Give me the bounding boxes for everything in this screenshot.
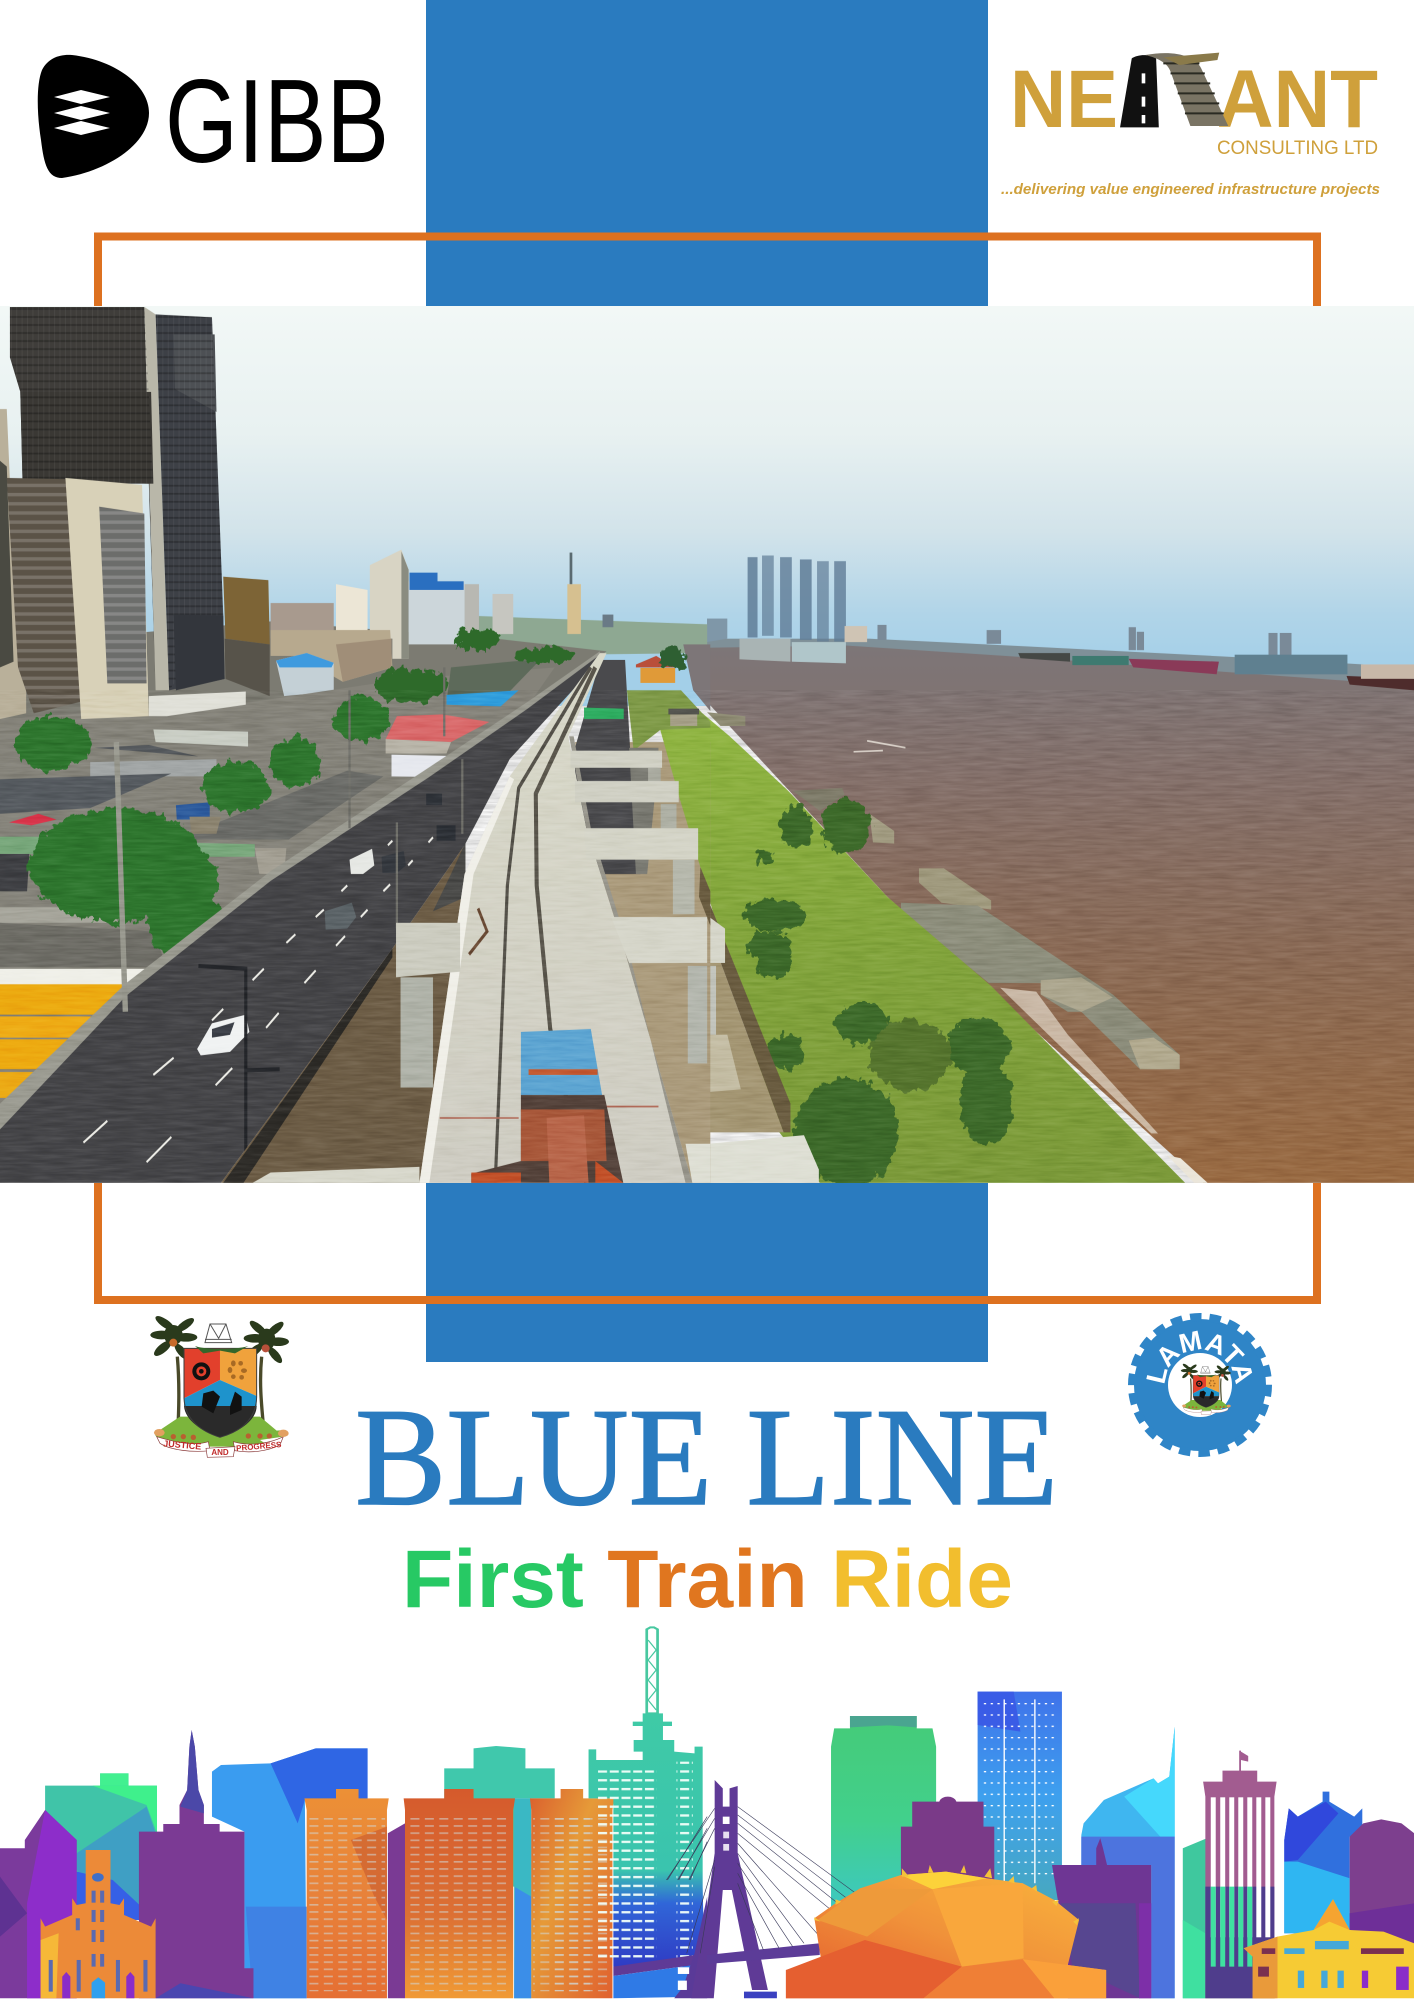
- logo: Nexant Consulting: ...delivering value engineered infrastructure projects: [1001, 181, 1380, 198]
- tower 3: [530, 1789, 614, 1998]
- green tower: [831, 1716, 936, 1907]
- purple block: [901, 1797, 994, 1880]
- tower 2: [404, 1789, 515, 1998]
- west side: city, road, guideway: [0, 307, 710, 1183]
- big blue building: [212, 1748, 368, 1998]
- guideway pier: [710, 918, 726, 963]
- maintenance vehicle: [471, 1029, 623, 1183]
- tracks: [495, 667, 591, 1183]
- state coat of arms: [150, 1314, 289, 1457]
- water: [702, 646, 1414, 1183]
- foam: [1000, 988, 1158, 1133]
- purple west building: [0, 1810, 77, 1998]
- skyline: east half: [666, 1692, 1414, 1998]
- teal building: [45, 1773, 157, 1920]
- centre teal building: [444, 1746, 555, 1998]
- blue tower: [978, 1692, 1062, 1900]
- fence, dirt, slab: [710, 962, 784, 1132]
- lagoon and east shore: [702, 555, 1414, 1187]
- lagoon edge: [683, 644, 710, 711]
- logo: GIBB: [38, 55, 389, 188]
- green trees far: [373, 628, 577, 703]
- grass bank: [702, 713, 1185, 1183]
- guideway deck: [419, 653, 692, 1183]
- bushes: [743, 798, 1014, 1187]
- blue panel: bottom: [426, 1183, 988, 1362]
- roofs and signs: [386, 714, 489, 742]
- piers: [707, 712, 745, 726]
- tower 1: [304, 1789, 389, 1998]
- spire building: [139, 1730, 253, 1998]
- green sign: [584, 708, 624, 719]
- logo: Nexant Consulting: NE: [1010, 54, 1118, 145]
- logo: Nexant Consulting: CONSULTING LTD: [1217, 138, 1378, 159]
- lamp posts: [116, 742, 125, 1012]
- ships: [1018, 653, 1070, 662]
- yellow stacks: [0, 968, 145, 984]
- logo: Nexant Consulting: [1001, 53, 1380, 198]
- purple behind towers: [388, 1823, 405, 1998]
- parking: [0, 774, 171, 814]
- blue gabled building: [1284, 1792, 1362, 1933]
- state coat of arms: JUSTICE: [163, 1438, 202, 1452]
- oil rigs: [748, 555, 846, 642]
- ground buildings: [149, 691, 246, 716]
- bridge cables west: [667, 1817, 707, 1880]
- crossheads and columns: [396, 751, 707, 1088]
- purple block right: [1052, 1838, 1151, 1998]
- haze strip: [469, 616, 707, 656]
- carriageway: [575, 660, 640, 874]
- distant skyline: [271, 550, 613, 659]
- state coat of arms: PROGRESS: [236, 1440, 282, 1453]
- lane markings: [83, 837, 433, 1162]
- ground beneath: [221, 845, 465, 1183]
- far shore: [707, 638, 1414, 681]
- bridge deck west: [613, 1953, 707, 1976]
- bridge pylon: [666, 1780, 856, 1998]
- subtitle: First Train Ride: First Train Ride: [402, 1534, 1013, 1625]
- orange frame: bottom: [98, 1183, 1317, 1300]
- column tower: [1203, 1751, 1277, 1998]
- green building behind columns: [1183, 1833, 1257, 1998]
- green trees near: [15, 697, 389, 960]
- east of guideway: bank and carriageway: [575, 644, 710, 1183]
- state coat of arms: AND: [211, 1448, 229, 1457]
- teal tower with mast: [589, 1627, 704, 1967]
- purple domed building: [1350, 1819, 1414, 1945]
- ground: [0, 667, 555, 1115]
- road: [0, 653, 607, 1183]
- orange frame: top: [98, 236, 1317, 306]
- yellow colonial building: [1244, 1899, 1414, 1998]
- church: [41, 1850, 156, 1998]
- distant buildings: [877, 625, 1291, 656]
- icon: road and rail arch: [1120, 53, 1228, 127]
- orange building and trees: [640, 668, 675, 683]
- photo grain: [0, 690, 1414, 1183]
- bridge cables east: [666, 1807, 856, 1953]
- stadium dome: [786, 1865, 1106, 1998]
- blue panel: top: [426, 0, 988, 306]
- city base: [0, 616, 707, 720]
- title: BLUE LINE: BLUE LINE: [355, 1380, 1058, 1535]
- skyline illustration: [0, 1627, 1414, 1998]
- cars: [197, 1015, 249, 1055]
- bridge leg: [674, 1897, 707, 1998]
- towers: [10, 307, 156, 690]
- photo: Blue Line guideway along Lagos lagoon: [0, 306, 1414, 1187]
- logo: LAMATA gear: [1128, 1313, 1272, 1457]
- plot behind: [627, 690, 710, 751]
- logo: LAMATA gear: LAMATA: [1146, 1330, 1252, 1384]
- cyan curved tower: [1081, 1727, 1175, 1998]
- grass: [660, 728, 710, 897]
- logo: GIBB: GIBB: [165, 55, 389, 188]
- low-rise hotel and blue roofs: [271, 630, 392, 682]
- skyline: west half: [0, 1627, 707, 1998]
- sky: [0, 306, 1414, 706]
- dirt base: [575, 742, 710, 1183]
- slab: [686, 1144, 710, 1183]
- logo: Nexant Consulting: ANT: [1217, 54, 1378, 145]
